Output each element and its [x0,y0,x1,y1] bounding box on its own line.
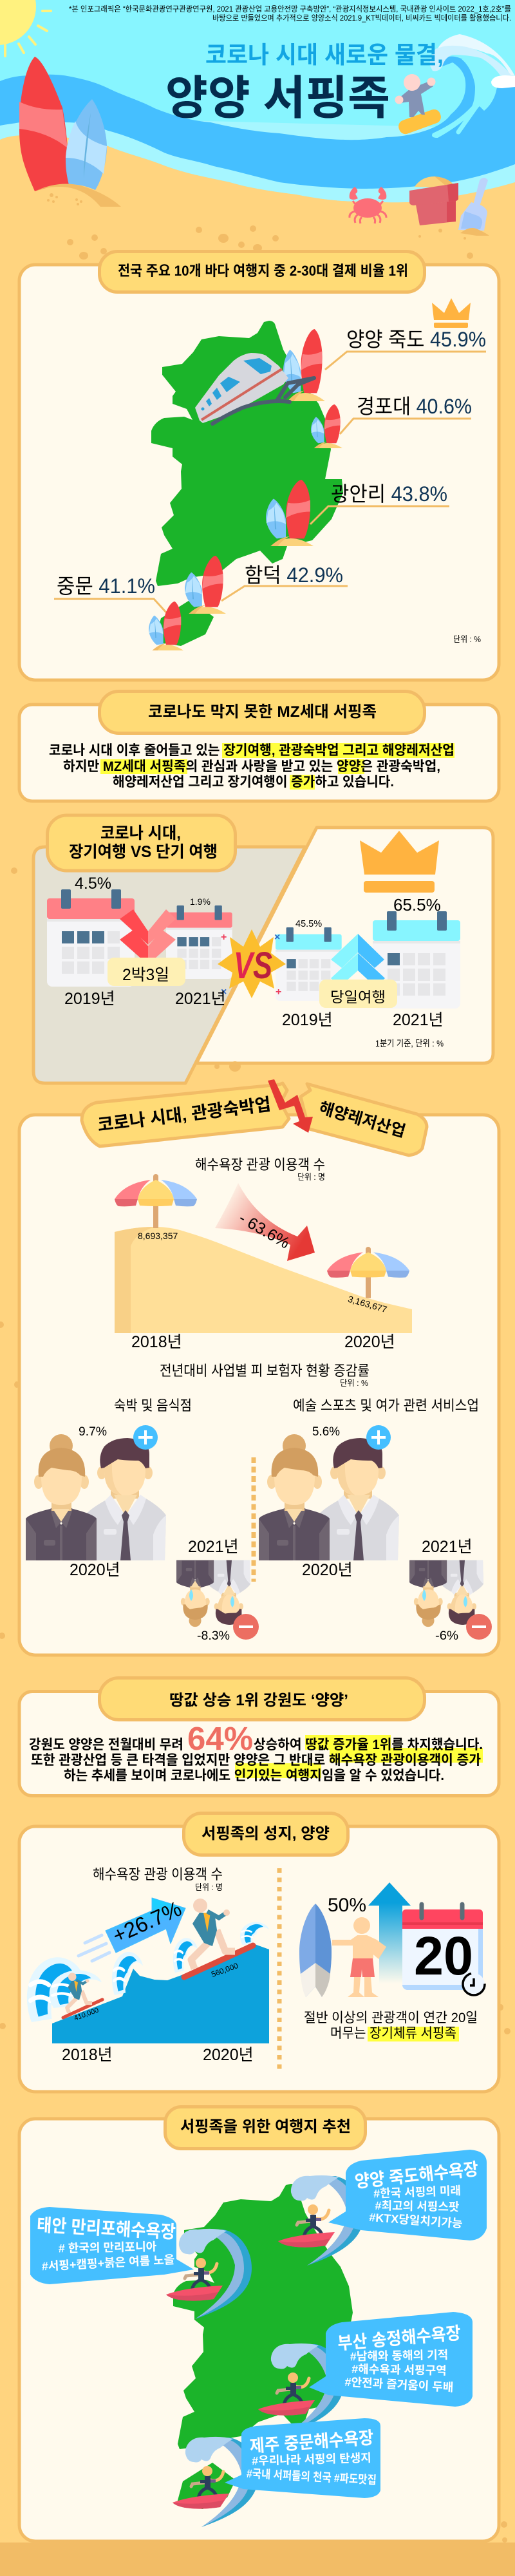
heading: 전국 주요 10개 바다 여행지 중 2-30대 결제 비율 1위 [118,263,408,279]
heading: long vs short trips [48,815,236,871]
bottom band [0,2543,515,2576]
calendar 2019 long trip [47,889,135,987]
small marks: × [221,987,227,998]
person with board [332,1917,386,1997]
shovel [458,178,489,236]
bubble Yangyang: #KTX당일치기가능 [369,2211,463,2230]
heading [99,251,425,292]
hill chart [115,1227,412,1333]
body text: 하는 추세를 보이며 코로나에도 인기있는 여행지임을 알 수 있었습니다. [64,1768,444,1783]
body text: 코로나 시대 이후 줄어들고 있는 장기여행, 관광숙박업 그리고 해양레저산업 [49,743,454,758]
bubble Jeju [225,2418,380,2498]
bubble Jeju: #국내 서퍼들의 천국 #파도맛집 [247,2467,377,2486]
banner left: 코로나 시대, 관광숙박업 [97,1095,272,1135]
values: 8,693,357 [138,1231,178,1241]
bubble Busan [309,2312,473,2407]
map of Korea [151,321,343,646]
years: 2021년 [175,990,226,1008]
calendar 20 days: 20 [414,1926,473,1986]
heading: 땅값 상승 1위 강원도 ‘양양’ [169,1692,348,1709]
highlights [100,743,454,790]
panel: long vs short trips, right [196,828,493,1063]
people 2021 arts [409,1560,483,1627]
label 2박3일 [108,958,185,986]
bubble Yangyang: #한국 서핑의 미래 [373,2184,461,2200]
subhead lodging: 숙박 및 음식점 [114,1397,192,1414]
label: 경포대: 경포대 40.6% [357,395,472,418]
body text [49,743,454,790]
heading [99,692,425,733]
years: 2021년 [393,1011,444,1029]
values: 9.7% [79,1425,107,1439]
label: 양양 죽도: 양양 죽도 45.9% [346,328,486,351]
speed lines [79,1935,109,1961]
unit note: 단위 : % [453,634,481,644]
growth label: +26.7% [109,1897,185,1947]
people 2020 lodging [26,1434,166,1560]
people 2021 lodging [176,1560,250,1627]
body text: 상승하여 땅값 증가율 1위를 차지했습니다. [254,1738,483,1752]
insured title: 전년대비 사업별 피 보험자 현황 증감률 [160,1363,370,1379]
crab [350,187,386,223]
subhead arts: 예술 스포츠 및 여가 관련 서비스업 [293,1397,479,1414]
panel: surfer's holy land [19,1814,499,2092]
value 2020: 560,000 [210,1961,239,1979]
years [70,1538,473,1579]
title: 코로나 시대 새로운 물결, [205,42,444,68]
wave surfer Taean [166,2229,252,2319]
chart unit: 단위 : 명 [297,1172,325,1182]
decline arrow [215,1183,315,1261]
panel: MZ beach spending map [19,251,499,680]
clock icon [463,1973,485,1995]
VS burst: VS [234,945,272,987]
bubble Yangyang: 양양 죽도해수욕장 [354,2159,480,2192]
sea foam [0,116,515,202]
percentages: 4.5% [75,875,111,893]
sand dots [67,225,473,260]
sand [0,135,515,270]
label: 광안리: 광안리 43.8% [331,482,447,506]
sun [0,0,51,56]
years: 2021년 [188,1538,239,1556]
down chevrons [120,909,176,965]
wave pale crest [438,34,515,76]
body text: 하지만 MZ세대 서핑족의 관심과 사랑을 받고 있는 양양은 관광숙박업, [63,759,440,774]
caption: 머무는 장기체류 서핑족 [330,2026,456,2041]
divider dots [277,1868,282,2070]
people 2020 arts [259,1434,399,1560]
values [79,1425,458,1643]
highlights [235,1735,483,1778]
body text: 64% [187,1720,253,1757]
percentages: 1.9% [190,896,211,907]
umbrella 2020 [327,1247,409,1298]
up chevrons [331,934,385,987]
bubble Jeju: 제주 중문해수욕장 [249,2428,375,2456]
panel: MZ generation surfers [19,692,499,801]
banner right [301,1084,427,1155]
years [131,1333,395,1351]
red surfboard [19,57,69,191]
wave inner swoosh [432,59,500,138]
panel: long vs short trips, left [33,847,305,1083]
years [62,2046,254,2064]
surfer on wave [395,74,443,136]
label: 중문: 중문 41.1% [57,574,155,598]
small marks: + [276,987,281,998]
small marks: + [221,932,227,943]
value 2018: 410,000 [73,2007,100,2022]
label: 함덕: 함덕 42.9% [245,564,343,587]
wave chart [52,1944,269,2043]
sky [0,0,515,193]
title: 양양 서핑족 [165,73,390,124]
years: 2019년 [282,1011,333,1029]
insured unit: 단위 : % [340,1378,368,1388]
percentages [75,875,441,929]
surfer 2020 [184,1899,253,1977]
decline label: - 63.6% [236,1209,293,1253]
bubble Yangyang [328,2150,487,2240]
heading: 서핑족의 성지, 양양 [201,1825,330,1842]
panel: land price [19,1678,499,1795]
chart title: 해수욕장 관광 이용객 수 [93,1866,223,1882]
50% label: 50% [328,1895,366,1916]
caption [304,2011,478,2041]
crown [432,298,471,328]
heading: long vs short trips: 코로나 시대, [100,824,181,842]
heading: long vs short trips: 장기여행 VS 단기 여행 [69,843,218,861]
leader lines [54,352,486,614]
wave crest band [429,46,512,76]
body text: 해양레저산업 그리고 장기여행이 증가하고 있습니다. [113,775,394,790]
umbrella 2018 [115,1174,197,1228]
years [64,990,444,1029]
train [195,353,314,424]
value 2020: 3,163,677 [347,1294,388,1314]
years: 2018년 [62,2046,113,2064]
map of Korea [173,2184,365,2509]
panel: recommended destinations [19,2107,499,2541]
years: 2020년 [344,1333,395,1351]
title [165,42,444,124]
bubble Busan: #해수욕과 서핑구역 [351,2363,447,2377]
years: 2018년 [131,1333,182,1351]
calendar 2021 long trip [166,905,232,979]
values: 5.6% [312,1425,340,1439]
calendar 2019 day trip [276,927,342,1001]
bubble Yangyang: #최고의 서핑스팟 [375,2199,460,2213]
unit note: 1분기 기준, 단위 : % [375,1038,444,1048]
heading [165,2107,366,2148]
calendar 2021 day trip [373,911,460,1009]
years: 2020년 [70,1561,120,1579]
chart title: 해수욕장 관광 이용객 수 [195,1157,325,1173]
body text: 강원도 양양은 전월대비 무려 [29,1738,183,1752]
panel: tourism and leisure industry [19,1079,499,1655]
surfer 2018 [63,1973,102,2018]
percentages: 65.5% [393,895,441,914]
years: 2020년 [203,2046,254,2064]
bubble Taean [30,2207,194,2284]
sea and wave [0,57,515,189]
small marks: × [274,932,280,943]
label 당일여행: 당일여행 [330,989,386,1005]
minus icons [233,1614,492,1640]
bubble Busan: #남해와 동해의 기적 [350,2349,448,2363]
up arrow [368,1882,411,1984]
values: -8.3% [197,1629,230,1643]
background sand dots [0,867,510,2543]
years: 2019년 [64,990,115,1008]
sand mound [35,184,121,207]
bubble Jeju: #우리나라 서핑의 탄생지 [252,2452,371,2467]
bubble Taean: #서핑+캠핑+붉은 여름 노을 [41,2253,175,2273]
years: 2021년 [422,1538,473,1556]
bubble Busan: 부산 송정해수욕장 [337,2324,462,2353]
highlight [368,2027,459,2041]
wave crests [27,1922,269,2022]
percentages: 45.5% [295,919,322,929]
large crown [360,831,439,893]
wave surfer Yangyang [278,2175,364,2266]
VS burst [218,929,286,998]
years: 2020년 [302,1561,353,1579]
body text [29,1720,483,1783]
banner left [82,1083,289,1146]
bubble Busan: #안전과 즐거움이 두배 [344,2376,454,2394]
values: -6% [435,1629,458,1643]
bubble Taean: # 한국의 만리포니아 [59,2240,157,2255]
banner right: 해양레저산업 [317,1099,407,1141]
divider dots [251,1457,256,1582]
wave streak [458,102,480,132]
surfboards [149,329,342,650]
heading [99,1678,425,1719]
growth arrow [106,1898,185,1953]
footnote [69,5,511,23]
blue surfboard [66,99,107,190]
caption: 절반 이상의 관광객이 연간 20일 [304,2011,478,2025]
bubble Taean: 태안 만리포해수욕장 [36,2215,176,2242]
body text: 또한 관광산업 등 큰 타격을 입었지만 양양은 그 반대로 해수욕장 관광이용객이 증가 [31,1753,481,1768]
heading: 코로나도 막지 못한 MZ세대 서핑족 [148,703,377,721]
small marks [221,932,281,998]
plus icons [133,1425,391,1450]
surfboard [299,1904,332,1997]
label 2박3일: 2박3일 [122,966,169,984]
wave surfer Jeju [173,2437,258,2527]
foam cloud [491,75,515,88]
label 당일여행 [319,980,397,1008]
wave surfer Busan [258,2344,344,2434]
header scene [0,0,515,270]
chart unit: 단위 : 명 [195,1882,223,1892]
lightning arrow [268,1079,313,1133]
bucket [409,176,458,225]
calendar 20 days [402,1904,483,1990]
heading: 서핑족을 위한 여행지 추천 [180,2118,351,2136]
heading [184,1814,348,1855]
